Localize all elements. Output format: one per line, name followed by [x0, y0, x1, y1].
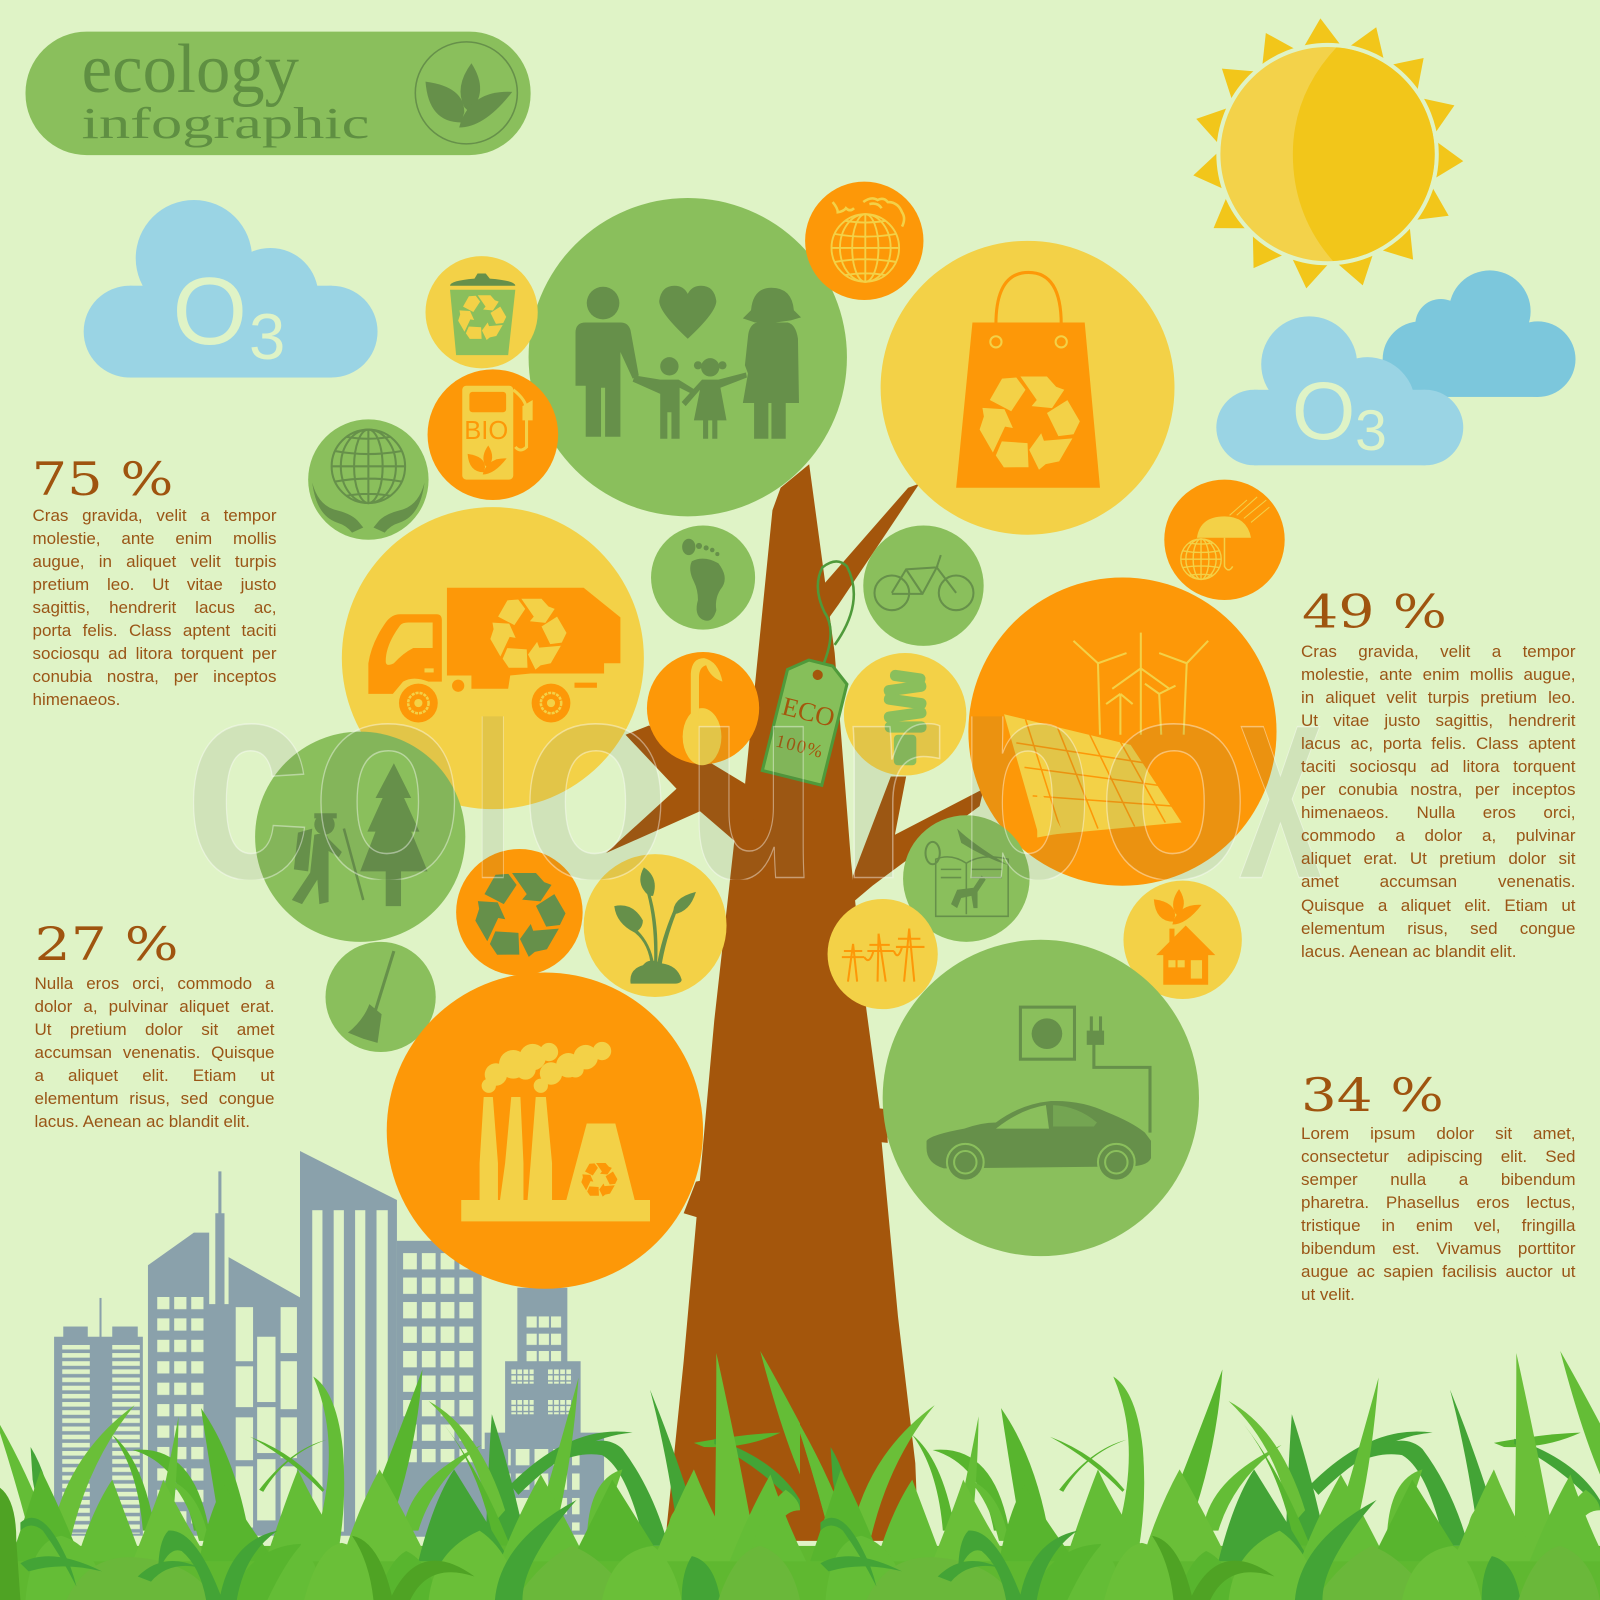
clouds: ozone right: 3 [1355, 399, 1387, 463]
text block: 75 percent: sagittis, hendrerit lacus ac, [32, 598, 276, 617]
text block: 75 percent: Cras gravida, velit a tempor [32, 506, 276, 525]
circle: power lines [828, 899, 938, 1009]
text block: 27 percent: lacus. Aenean ac blandit elit. [34, 1112, 250, 1131]
text block: 75 percent: augue, in aliquet velit turpis [32, 552, 276, 571]
watermark: o [311, 619, 464, 939]
heading: 27 %: 27 % [35, 917, 179, 971]
watermark: x [1239, 619, 1323, 939]
text block: 34 percent: semper nulla a bibendum [1301, 1170, 1576, 1189]
circle: recycle symbol [456, 849, 583, 976]
cloud: ozone left: 3 [249, 300, 285, 373]
watermark: u [686, 619, 818, 939]
watermark: l [471, 619, 514, 939]
text block: 49 percent: Ut vitae justo sagittis, hendrerit [1301, 711, 1576, 730]
text block: 34 percent: bibendum est. Vivamus porttitor [1301, 1239, 1576, 1258]
heading: 75 %: 75 % [32, 452, 173, 506]
text block: 34 percent: augue ac sapien facilisis auctor ut [1301, 1262, 1576, 1281]
watermark: o [1097, 619, 1250, 939]
text block: 34 percent: consectetur adipiscing elit. Sed [1301, 1147, 1576, 1166]
text block: 49 percent: himenaeos. Nulla eros orci, [1301, 803, 1576, 822]
watermark: b [956, 619, 1094, 939]
text block: 27 percent: dolor a, pulvinar aliquet erat. [34, 997, 274, 1016]
text block: 75 percent: porta felis. Class aptent taciti [32, 621, 276, 640]
heading: 49 %: 49 % [1302, 585, 1447, 639]
clouds: ozone right: O [1292, 366, 1355, 457]
tree trunk and branches [606, 464, 984, 1541]
text block: 49 percent: lacus ac, porta felis. Class aptent [1301, 734, 1576, 753]
text block: 34 percent: tristique in enim vel, fringilla [1301, 1216, 1576, 1235]
text block: 49 percent: per conubia nostra, per inceptos [1301, 780, 1576, 799]
text block: 27 percent: accumsan venenatis. Quisque [34, 1043, 274, 1062]
text block: 49 percent: in aliquet velit turpis pretium leo. [1301, 688, 1576, 707]
text block: 49 percent: lacus. Aenean ac blandit elit. [1301, 942, 1516, 961]
circle: hiker and tree [255, 732, 465, 942]
circle: globe in hands [308, 419, 429, 540]
text block: 49 percent: amet accumsan venenatis. [1301, 872, 1576, 891]
text block: 49 percent: Cras gravida, velit a tempor [1301, 642, 1576, 661]
circle: shopping bag [881, 241, 1174, 535]
text block: 49 percent [1301, 642, 1576, 961]
circle: globe with clouds [805, 182, 923, 300]
text block: 75 percent: himenaeos. [32, 690, 120, 709]
header pill [26, 31, 531, 155]
grass foreground [0, 1351, 1600, 1600]
eco price tag: ECO [779, 691, 838, 733]
cloud: ozone left [84, 200, 378, 378]
circle: family [529, 198, 847, 516]
text block: 49 percent: Quisque a aliquet elit. Etiam ut [1301, 896, 1576, 915]
circle: broom [326, 942, 436, 1052]
circle: energy-saving bulb [844, 653, 966, 776]
text block: 75 percent: pretium leo. Ut vitae justo [32, 575, 276, 594]
watermark: o [520, 619, 670, 939]
text block: 34 percent: Lorem ipsum dolor sit amet, [1301, 1124, 1576, 1143]
text block: 49 percent: elementum risus, sed congue [1301, 919, 1576, 938]
cloud: ozone left: O [172, 258, 247, 365]
header pill: infographic [82, 98, 369, 148]
circle: sprout [584, 854, 727, 997]
eco price tag [762, 561, 854, 785]
eco price tag: 100% [774, 731, 826, 762]
header pill: ecology [82, 31, 299, 108]
circle: footprint [651, 526, 755, 630]
text block: 49 percent: taciti sociosqu ad litora torquent [1301, 757, 1576, 776]
circle: factory [387, 972, 703, 1289]
circle: bio fuel: BIO [464, 417, 508, 445]
circle: eco house [1123, 881, 1242, 999]
circle: recycle bin [426, 256, 538, 368]
circle: bicycle [863, 526, 984, 646]
text block: 75 percent: sociosqu ad litora torquent per [32, 644, 276, 663]
watermark [193, 716, 1322, 880]
circle: recycling truck [342, 507, 644, 809]
heading: 34 %: 34 % [1301, 1068, 1444, 1122]
text block: 27 percent [34, 974, 274, 1131]
text block: 27 percent: a aliquet elit. Etiam ut [34, 1066, 274, 1085]
clouds: ozone right [1216, 270, 1576, 465]
text block: 49 percent: commodo a dolor a, pulvinar [1301, 826, 1576, 845]
text block: 75 percent [32, 506, 276, 709]
circle: wind and solar [968, 578, 1277, 886]
text block: 34 percent: pharetra. Phasellus eros lectus, [1301, 1193, 1576, 1212]
text block: 75 percent: molestie, ante enim mollis [32, 529, 276, 548]
text block: 49 percent: aliquet erat. Ut pretium dolor sit [1301, 849, 1576, 868]
circle: seed note [647, 652, 759, 765]
text block: 34 percent [1301, 1124, 1576, 1304]
city skyline [54, 1151, 604, 1537]
sun [1191, 18, 1465, 292]
text block: 27 percent: elementum risus, sed congue [34, 1089, 274, 1108]
circle: electric car [883, 940, 1199, 1256]
text block: 34 percent: ut velit. [1301, 1285, 1355, 1304]
circle: rain and globe [1164, 480, 1285, 600]
text block: 75 percent: conubia nostra, per inceptos [32, 667, 276, 686]
circle: book with wildlife [903, 815, 1030, 942]
text block: 49 percent: molestie, ante enim mollis augue, [1301, 665, 1576, 684]
watermark: c [185, 619, 311, 939]
circle: bio fuel [428, 369, 558, 500]
text block: 27 percent: Nulla eros orci, commodo a [34, 974, 274, 993]
watermark: r [835, 619, 944, 939]
text block: 27 percent: Ut pretium dolor sit amet [34, 1020, 274, 1039]
